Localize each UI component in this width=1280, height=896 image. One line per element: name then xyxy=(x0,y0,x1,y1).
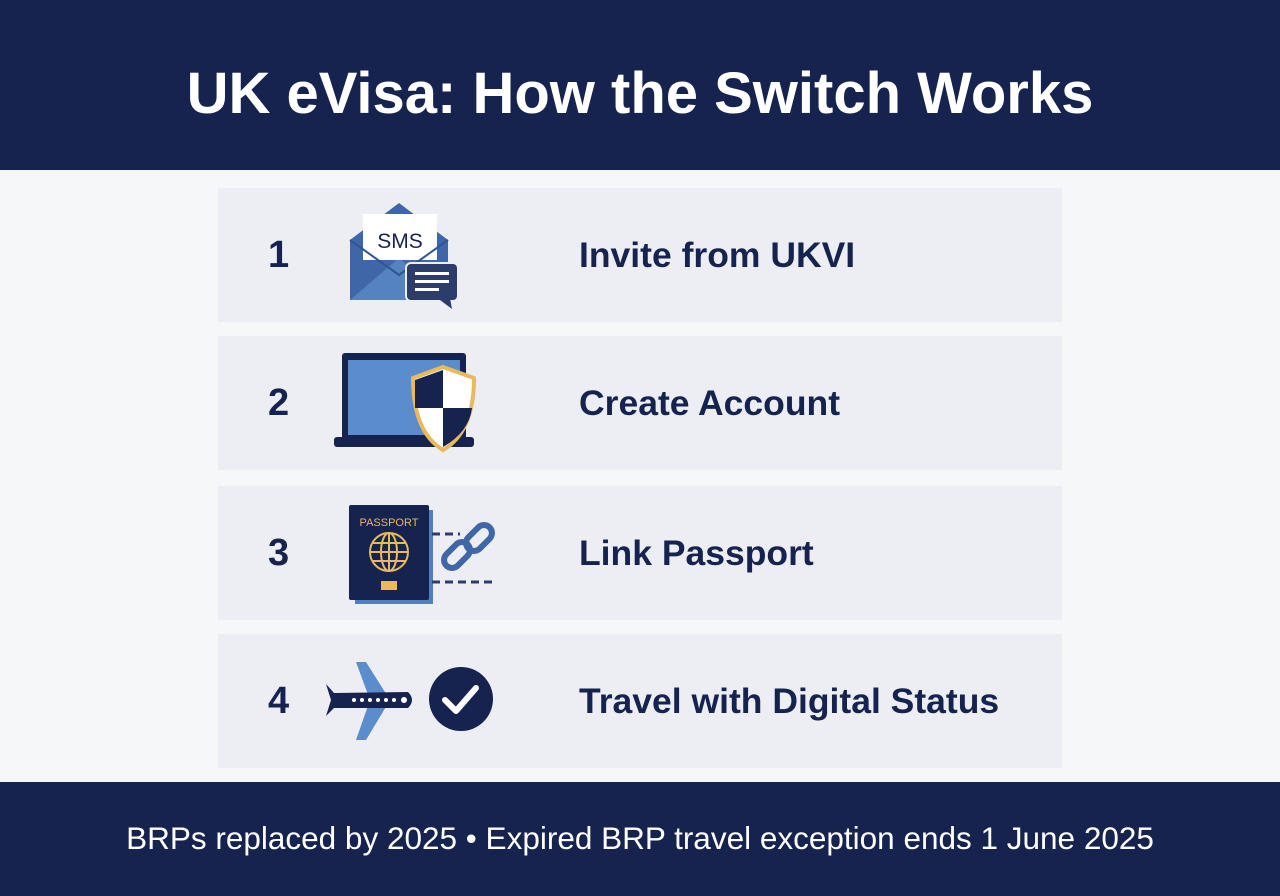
icon: passport with link xyxy=(349,505,495,604)
step label 1: Invite from UKVI xyxy=(579,235,855,275)
step 4 row xyxy=(218,634,1062,768)
footer note xyxy=(0,782,1280,896)
icon: plane and check xyxy=(326,662,493,740)
step 3 row xyxy=(218,486,1062,620)
icon: passport with link: PASSPORT xyxy=(360,517,419,529)
step label 4: Travel with Digital Status xyxy=(579,681,999,721)
step 1 row xyxy=(218,188,1062,322)
step label 2: Create Account xyxy=(579,383,840,423)
icon: envelope with SMS xyxy=(350,203,457,309)
step label 3: Link Passport xyxy=(579,533,814,573)
step 2 row xyxy=(218,336,1062,470)
icon: laptop with shield xyxy=(334,353,476,452)
number 1: 1 xyxy=(268,234,289,276)
title xyxy=(0,0,1280,170)
title: UK eVisa: How the Switch Works xyxy=(187,61,1093,126)
number 2: 2 xyxy=(268,382,289,424)
footer note: BRPs replaced by 2025 • Expired BRP travel exception ends 1 June 2025 xyxy=(126,820,1154,856)
number 4: 4 xyxy=(268,680,289,722)
number 3: 3 xyxy=(268,532,289,574)
icon: envelope with SMS: SMS xyxy=(377,230,423,253)
